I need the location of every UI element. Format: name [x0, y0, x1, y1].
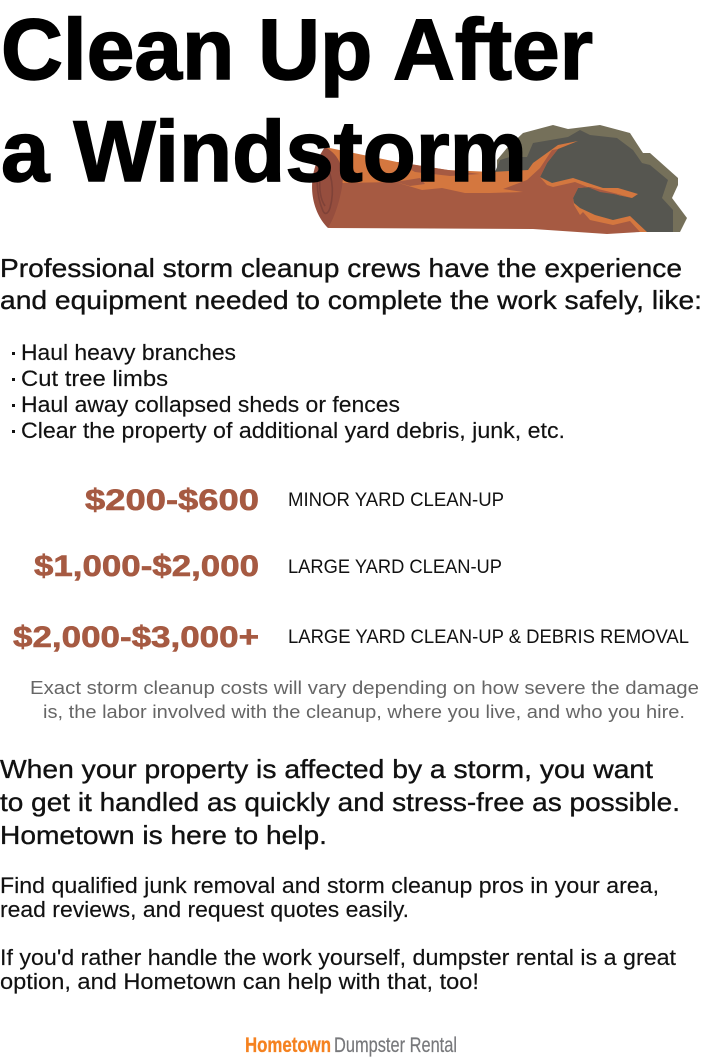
- paragraph: dumpster rental: If you'd rather handle the work yourself, dumpster rental is a great: [0, 945, 676, 970]
- cost note: [30, 677, 699, 722]
- cost: large yard clean-up: LARGE YARD CLEAN-UP: [288, 557, 502, 578]
- log cut end: [312, 147, 343, 228]
- logo: Hometown Dumpster Rental: Hometown: [245, 1034, 331, 1057]
- title: a Windstorm: [1, 104, 527, 200]
- call to action paragraph: [0, 754, 680, 850]
- cost: minor yard clean-up: MINOR YARD CLEAN-UP: [288, 490, 504, 511]
- log rings: [317, 158, 332, 213]
- log: [312, 141, 647, 234]
- bullet list: Clear the property of additional yard debris, junk, etc.: [21, 418, 565, 443]
- bullet list: Haul away collapsed sheds or fences: [21, 392, 400, 417]
- cost: large yard clean-up: [34, 550, 502, 583]
- title: Clean Up After: [1, 2, 593, 98]
- cost table: [13, 484, 689, 654]
- cost: large yard clean-up and debris removal: LARGE YARD CLEAN-UP & DEBRIS REMOVAL: [288, 627, 689, 648]
- bullet list: Haul heavy branches: [21, 340, 236, 365]
- cost: minor yard clean-up: [85, 484, 504, 517]
- cost: large yard clean-up: $1,000-$2,000: [34, 550, 259, 583]
- cost: large yard clean-up and debris removal: [13, 621, 689, 654]
- cost: minor yard clean-up: $200-$600: [85, 484, 259, 517]
- logo: Hometown Dumpster Rental: [245, 1034, 457, 1057]
- logo: Hometown Dumpster Rental: Dumpster Rental: [334, 1034, 457, 1057]
- call to action paragraph: When your property is affected by a storm, you want: [0, 754, 654, 784]
- paragraph: find pros: Find qualified junk removal and storm cleanup pros in your area,: [0, 873, 659, 898]
- intro paragraph: [0, 253, 702, 315]
- bullet list: Cut tree limbs: [21, 366, 168, 391]
- cost: large yard clean-up and debris removal: $2,000-$3,000+: [13, 621, 259, 654]
- paragraph: dumpster rental: option, and Hometown can help with that, too!: [0, 969, 479, 994]
- intro paragraph: and equipment needed to complete the work safely, like:: [0, 285, 702, 315]
- illustration: fallen log and rock: [312, 125, 687, 234]
- paragraph: dumpster rental: [0, 945, 676, 994]
- call to action paragraph: Hometown is here to help.: [0, 820, 327, 850]
- rock: [495, 125, 687, 232]
- title: [1, 2, 593, 200]
- cost note: Exact storm cleanup costs will vary depending on how severe the damage: [30, 677, 699, 698]
- bullet list: [12, 340, 565, 443]
- paragraph: find pros: [0, 873, 659, 922]
- log shadow patches: [395, 162, 480, 186]
- log body: [328, 149, 640, 234]
- paragraph: find pros: read reviews, and request quotes easily.: [0, 897, 409, 922]
- intro paragraph: Professional storm cleanup crews have the experience: [0, 253, 682, 283]
- cost note: is, the labor involved with the cleanup, where you live, and who you hire.: [43, 701, 685, 722]
- log highlight: [325, 141, 647, 232]
- call to action paragraph: to get it handled as quickly and stress-free as possible.: [0, 787, 680, 817]
